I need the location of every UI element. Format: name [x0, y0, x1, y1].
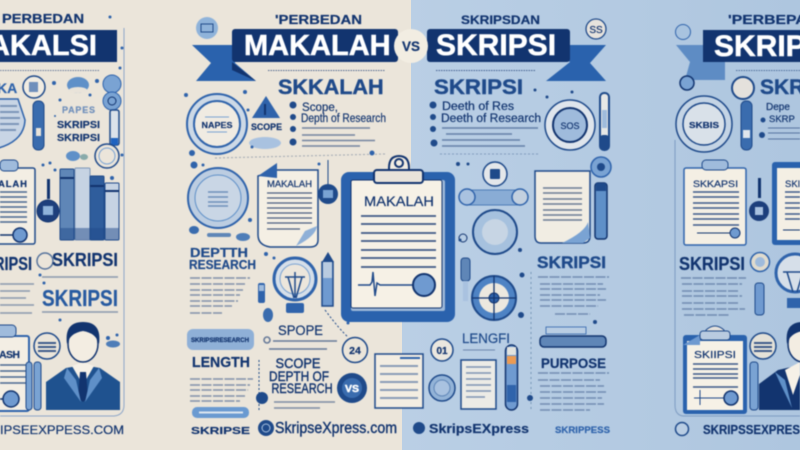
- bullet list: Depth of Research: [301, 113, 386, 125]
- icon: tube: [322, 252, 334, 306]
- clipboard clip: [374, 156, 423, 183]
- icon: striped tube: [506, 345, 518, 410]
- heading SCOPE DEPTH OF RESEARCH: [269, 356, 332, 396]
- banner SKRIPSI: [427, 29, 606, 81]
- text block depth: [190, 278, 250, 313]
- bullet list: Deeth of Research: [441, 113, 541, 125]
- right slice vial: [755, 283, 764, 315]
- right slice seal: SKBIS: [689, 120, 719, 130]
- icon: blob: [263, 308, 273, 322]
- icon: 01 badge: [431, 339, 453, 361]
- right slice SKRIPSI: SKRIPSI: [679, 254, 745, 274]
- right slice second clipboard: [772, 162, 800, 245]
- left slice label block: SKRIPSI: [57, 119, 100, 131]
- scattered dots right: [456, 88, 597, 401]
- heading SPOPE: SPOPE: [278, 323, 323, 338]
- left slice stamp: [34, 333, 60, 359]
- right slice ribbon: [676, 45, 725, 80]
- right slice panel: [675, 13, 800, 437]
- icon: round badge: [196, 17, 218, 39]
- logo: SkripsEXpress: SkripsEXpress: [429, 421, 529, 436]
- dark dot: [256, 392, 268, 404]
- icon: doc side tube: [595, 183, 607, 239]
- right slice lower clipboard: [683, 326, 747, 414]
- clipboard heartbeat: [358, 272, 435, 296]
- icon: save circle: [483, 162, 507, 186]
- left slice small icons: [66, 144, 119, 168]
- right slice heading: 'PERBEPAN: [728, 13, 800, 27]
- heading LENGFI: LENGFI: [462, 331, 510, 346]
- banner SKRIPSI: SKRIPSI: [436, 29, 556, 62]
- icon: triangle SCOPE: [249, 96, 282, 149]
- icon: doc MAKALAH: MAKALAH: [267, 179, 312, 190]
- left slice clipboard: [0, 160, 35, 244]
- icon: target ring: [545, 100, 595, 150]
- left slice pill: [106, 340, 120, 348]
- text block length: [190, 379, 253, 401]
- panel: makalah column: [184, 75, 397, 437]
- left slice label block: [57, 105, 100, 144]
- icon: round seal: [591, 157, 611, 177]
- right slice stamp: [750, 333, 776, 359]
- left slice round icon: [37, 179, 59, 222]
- icon: big circle: [188, 168, 248, 228]
- heading SCOPE DEPTH OF RESEARCH: DEPTH OF: [269, 369, 329, 384]
- right slice seal small: [750, 252, 770, 272]
- icon: lower doc middle: [375, 354, 423, 408]
- right slice badges: [676, 24, 754, 99]
- left slice text lines: [0, 277, 118, 313]
- left slice website: IPSEEXPPESS.COM: [0, 423, 124, 437]
- right slice round icon: [749, 178, 769, 221]
- left slice icons row: [23, 75, 121, 145]
- heading SKRIPSI: SKRIPSI: [434, 75, 523, 99]
- background: blue half: [402, 0, 800, 450]
- right slice text block: [681, 278, 746, 315]
- icon: lower doc right: [461, 360, 496, 409]
- icon: crosshair target: [472, 276, 516, 320]
- icon: 01 badge: 01: [436, 346, 448, 357]
- icon: doc MAKALAH: [258, 163, 318, 247]
- icon: SS badge: SS: [589, 25, 603, 36]
- pill: research label: SKRIPSIRESEARCH: [191, 337, 249, 344]
- icon: target ring: SOS: [560, 121, 580, 131]
- ribbon tail left: [192, 45, 256, 81]
- right slice bullet text: SKRP: [769, 114, 795, 125]
- left slice tube: [33, 101, 44, 150]
- text block purpose: [538, 373, 609, 410]
- right slice bulb: [776, 254, 800, 308]
- right slice person: [759, 322, 800, 410]
- left slice lower clipboard: [0, 325, 29, 411]
- logo: SkripseXpress: SkripseXpress.com: [275, 420, 397, 437]
- right slice tube: [750, 362, 758, 410]
- left slice heading: PERBEDAN: [2, 12, 84, 26]
- left slice books: [60, 168, 119, 240]
- pill: purpose tag: [540, 327, 606, 347]
- left slice tubes: [26, 362, 41, 410]
- right slice tube: [741, 101, 752, 150]
- text block skripsi: [538, 277, 609, 314]
- VS badge: VS: [402, 39, 420, 54]
- icon: small navy circle: [318, 160, 338, 204]
- icon: connector: [459, 189, 528, 205]
- right slice clipboard: [684, 160, 746, 245]
- pill: research label: [187, 329, 254, 350]
- panel: skripsi column: [375, 75, 611, 436]
- left slice label block: PAPES: [62, 105, 95, 115]
- heading RESEARCH: RESEARCH: [189, 257, 256, 272]
- icon: big lens: [473, 210, 517, 254]
- right slice border: [675, 140, 800, 416]
- right slice bullet text: [759, 102, 800, 139]
- clipboard sheet: [351, 180, 445, 311]
- heading PERBEDAN: 'PERBEDAN: [275, 12, 362, 27]
- heading LENGTH: LENGTH: [192, 354, 250, 371]
- bullet list: Scope,: [302, 100, 338, 114]
- left slice shield: [0, 99, 25, 149]
- banner MAKALAH: MAKALAH: [244, 30, 391, 62]
- label SKRIPPESS: SKRIPPESS: [555, 425, 610, 435]
- bullet list: [290, 100, 386, 146]
- icon: tube: [600, 93, 609, 150]
- VS round badge: [337, 373, 367, 403]
- icon: NAPES circle: [187, 94, 247, 154]
- icon: SS badge: [586, 19, 606, 39]
- spope text: [264, 337, 337, 349]
- left slice dots: [38, 16, 124, 344]
- heading DEPTH: DEPTTH: [190, 246, 248, 260]
- right slice bullet text: Depe: [766, 102, 790, 113]
- icon: NAPES circle: NAPES: [202, 120, 233, 130]
- label SKRIPSE: SKRIPSE: [191, 425, 250, 437]
- clipboard body: [341, 172, 455, 322]
- pill: blue label: [192, 407, 249, 418]
- icon: triangle SCOPE: SCOPE: [251, 122, 282, 133]
- bullet list: [430, 101, 541, 146]
- icon: 24 badge: [342, 338, 368, 362]
- left slice panel: [0, 12, 124, 437]
- icon: dial: [429, 375, 455, 401]
- left slice person: [46, 322, 120, 410]
- heading SCOPE DEPTH OF RESEARCH: RESEARCH: [272, 381, 332, 396]
- right slice second clipboard: SKI: [785, 179, 800, 190]
- right slice seal: [676, 96, 732, 152]
- heading SCOPE DEPTH OF RESEARCH: SCOPE: [276, 356, 320, 371]
- heading SKKALAH: SKKALAH: [278, 75, 384, 99]
- icon: 24 badge: 24: [349, 345, 361, 357]
- left slice border: [0, 28, 124, 416]
- VS round badge: VS: [345, 383, 359, 395]
- scattered dots: [184, 90, 374, 324]
- heading PURPOSE: PURPOSE: [541, 355, 606, 371]
- VS badge: [394, 29, 428, 63]
- clipboard title: MAKALAH: [364, 193, 434, 209]
- left slice heading SKRIPSI: SKRIPSI: [52, 250, 118, 270]
- panel: central clipboard: [341, 156, 455, 322]
- right slice lower clipboard: SKIIPSI: [694, 350, 736, 361]
- right slice clipboard: SKKAPSI: [693, 179, 738, 190]
- top icons lower: [189, 226, 250, 241]
- icon: light bulb: [274, 258, 316, 313]
- heading SKRIPSI right column: SKRIPSI: [537, 253, 606, 272]
- centre-left header: [192, 12, 606, 81]
- left slice big SKRIPSI: SKRIPSI: [42, 285, 118, 311]
- icon: small vial: [459, 234, 470, 301]
- clipboard lines: [361, 216, 436, 267]
- bullet list: Deeth of Res: [442, 101, 514, 113]
- icon: doc: [535, 171, 590, 243]
- left slice label block: SKRIPSI: [57, 132, 100, 144]
- icon: small vial: [258, 283, 265, 303]
- heading SKRIPSDAN: SKRIPSDAN: [461, 13, 540, 27]
